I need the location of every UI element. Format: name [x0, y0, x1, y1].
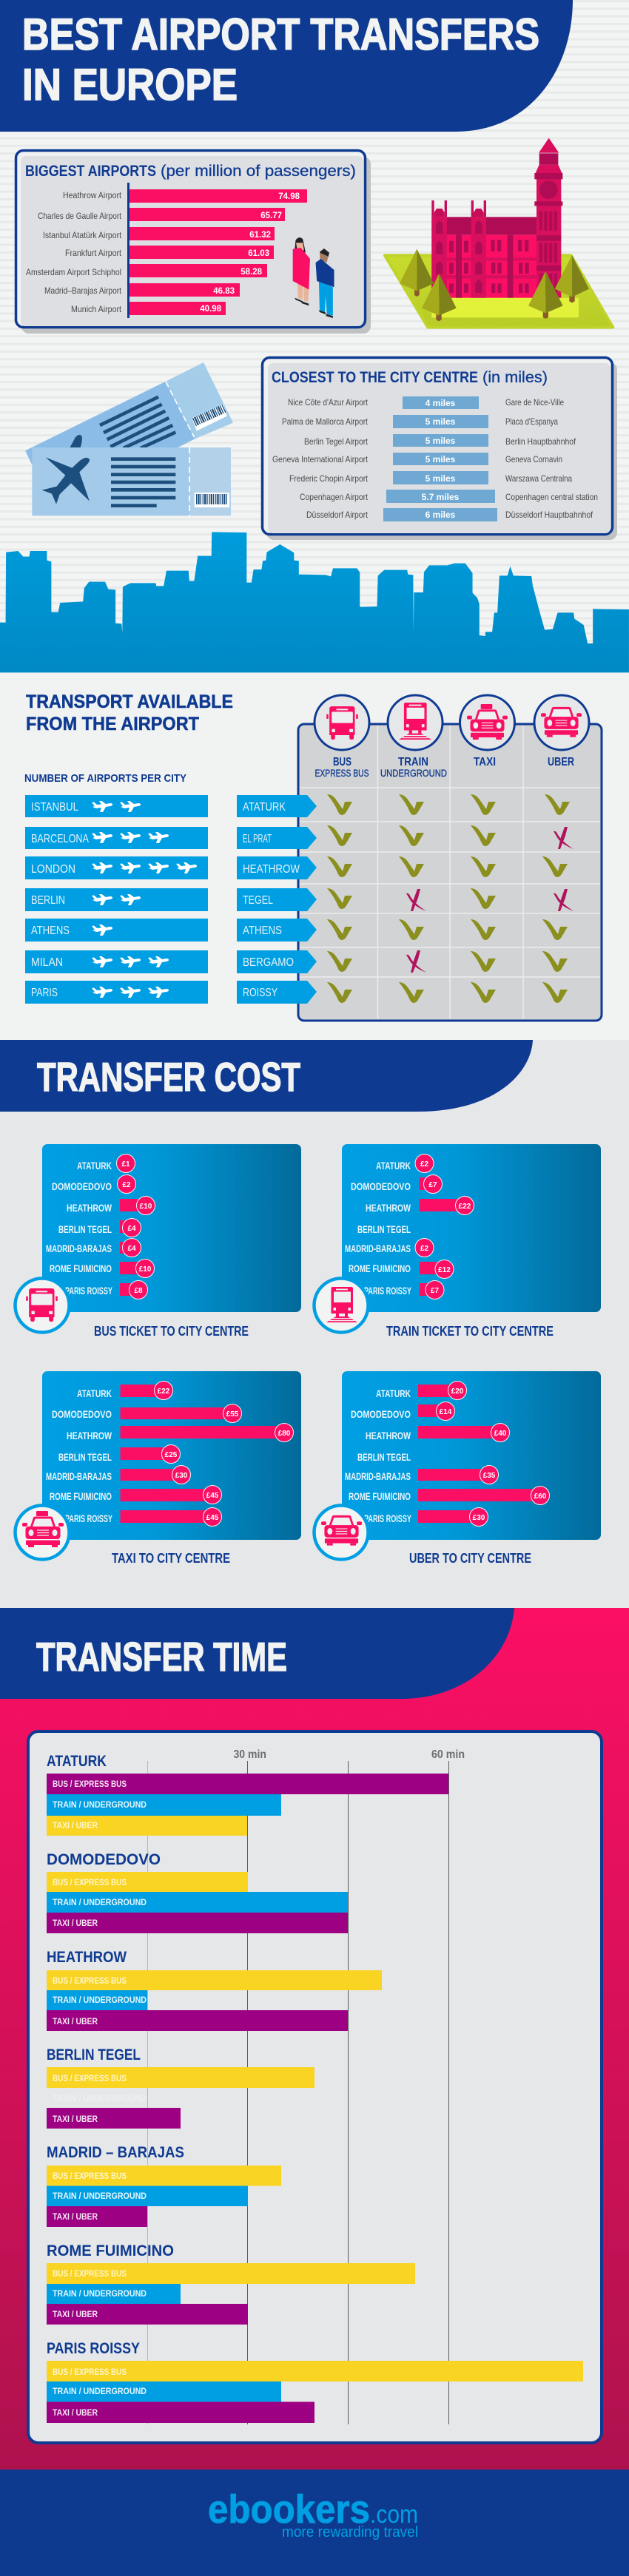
- airport arrows: TEGEL: [243, 894, 273, 907]
- panel: taxi cost: MADRID-BARAJAS: [46, 1470, 112, 1482]
- bar chart: passengers: Madrid–Barajas Airport: [44, 285, 122, 296]
- column headings: TRAIN: [398, 756, 428, 768]
- group: rome fuimicino: TAXI / UBER: [53, 2309, 98, 2319]
- illustration: big ben building and lawn: [385, 138, 613, 328]
- heading: biggest airports: (per million of passengers): [161, 163, 356, 180]
- airport names: [272, 397, 369, 520]
- group: paris roissy: TRAIN / UNDERGROUND: [53, 2386, 147, 2396]
- column headings: [315, 756, 574, 779]
- bar chart: passengers: Munich Airport: [71, 304, 122, 314]
- bar chart: passengers: Charles de Gaulle Airport: [38, 211, 122, 221]
- sub-heading: airports per city: NUMBER OF AIRPORTS PER CITY: [24, 772, 186, 785]
- heading: biggest airports: BIGGEST AIRPORTS: [25, 163, 156, 180]
- time axis: 30 min: [234, 1748, 266, 1761]
- panel: train ticket cost: £7: [428, 1181, 437, 1189]
- group: ataturk: ATATURK: [47, 1753, 107, 1770]
- group: domodedovo: DOMODEDOVO: [47, 1851, 161, 1868]
- heading: closest: CLOSEST TO THE CITY CENTRE: [272, 369, 478, 386]
- station names: [505, 397, 598, 520]
- group: berlin tegel: [47, 2046, 314, 2129]
- panel: taxi cost: PARIS ROISSY: [65, 1512, 112, 1524]
- panel: taxi cost: ROME FUIMICINO: [50, 1490, 112, 1502]
- table: transport availability: [237, 695, 602, 1021]
- panel: taxi cost: HEATHROW: [67, 1430, 112, 1441]
- panel: train ticket cost: £2: [420, 1160, 428, 1169]
- station names: Düsseldorf Hauptbahnhof: [505, 510, 593, 520]
- panel: bus ticket cost: ATATURK: [77, 1160, 112, 1172]
- column headings: BUS: [333, 756, 352, 768]
- bar chart: passengers: 61.32: [249, 231, 271, 240]
- column headings: UBER: [548, 756, 574, 768]
- group: domodedovo: [47, 1851, 348, 1933]
- station names: Gare de Nice-Ville: [505, 397, 564, 408]
- panel: taxi cost: £55: [226, 1410, 239, 1419]
- panel: bus ticket cost: [15, 1144, 301, 1339]
- station names: Copenhagen central station: [505, 492, 598, 502]
- panel: taxi cost: £25: [165, 1451, 178, 1459]
- city bars with plane counts: ISTANBUL: [31, 801, 78, 814]
- title banner: BEST AIRPORT TRANSFERS: [22, 10, 539, 59]
- panel: bus ticket cost: MADRID-BARAJAS: [46, 1243, 112, 1254]
- group: domodedovo: TRAIN / UNDERGROUND: [53, 1897, 147, 1907]
- panel: taxi cost: £45: [206, 1514, 219, 1522]
- airport names: Düsseldorf Airport: [306, 510, 369, 520]
- panel: bus ticket cost: PARIS ROISSY: [65, 1285, 112, 1297]
- caption: bus: BUS TICKET TO CITY CENTRE: [94, 1324, 249, 1339]
- logo: ebookers: more rewarding travel: [282, 2524, 418, 2540]
- airport arrows: EL PRAT: [243, 833, 272, 845]
- bar chart: passengers: 40.98: [200, 305, 222, 314]
- airport arrows: ATATURK: [243, 801, 286, 814]
- group: rome fuimicino: ROME FUIMICINO: [47, 2242, 174, 2259]
- city bars with plane counts: LONDON: [31, 863, 75, 876]
- time axis: [148, 1748, 465, 2424]
- panel: uber cost: ATATURK: [376, 1387, 411, 1399]
- column headings: TAXI: [474, 756, 496, 768]
- city bars with plane counts: BARCELONA: [31, 833, 89, 845]
- panel: transfer time chart: [28, 1731, 602, 2443]
- heading: transport available: [26, 692, 233, 734]
- group: berlin tegel: TRAIN / UNDERGROUND: [53, 2093, 147, 2103]
- bars: distance in miles: 5 miles: [426, 436, 456, 446]
- panel: uber cost: MADRID-BARAJAS: [345, 1470, 411, 1482]
- group: paris roissy: BUS / EXPRESS BUS: [53, 2367, 127, 2377]
- airport arrows: HEATHROW: [243, 863, 300, 876]
- city bars with plane counts: MILAN: [31, 956, 63, 969]
- city bars with plane counts: [25, 795, 208, 1004]
- group: ataturk: [47, 1753, 448, 1836]
- banner: transfer cost: [0, 1040, 533, 1112]
- panel: bus ticket cost: £10: [140, 1203, 152, 1211]
- group: heathrow: TRAIN / UNDERGROUND: [53, 1995, 147, 2005]
- caption: uber: UBER TO CITY CENTRE: [409, 1551, 531, 1566]
- illustration: city skyline: [0, 532, 629, 672]
- icon: two travellers: [293, 237, 334, 318]
- panel: bus ticket cost: BERLIN TEGEL: [58, 1223, 112, 1235]
- city bars with plane counts: BERLIN: [31, 894, 65, 907]
- panel: train ticket cost: PARIS ROISSY: [364, 1285, 411, 1297]
- group: madrid barajas: [47, 2144, 281, 2227]
- city bars with plane counts: ATHENS: [31, 924, 70, 937]
- panel: train ticket cost: £2: [420, 1245, 428, 1253]
- group: madrid barajas: TRAIN / UNDERGROUND: [53, 2191, 147, 2201]
- airport names: Berlin Tegel Airport: [304, 436, 369, 447]
- logo: ebookers: ebookers: [208, 2487, 370, 2532]
- panel: uber cost: £30: [473, 1514, 485, 1522]
- station names: Warszawa Centralna: [505, 473, 572, 484]
- airport names: Geneva International Airport: [272, 454, 369, 464]
- group: heathrow: TAXI / UBER: [53, 2016, 98, 2026]
- bars: distance in miles: 6 miles: [426, 510, 456, 520]
- panel: uber cost: £40: [494, 1430, 507, 1438]
- panel: uber cost: HEATHROW: [366, 1430, 411, 1441]
- bar chart: passengers: Heathrow Airport: [63, 190, 122, 200]
- airport arrows: BERGAMO: [243, 956, 294, 969]
- panel: bus ticket cost: HEATHROW: [67, 1202, 112, 1214]
- panel: bus ticket cost: £8: [134, 1287, 143, 1295]
- bar chart: passengers: Amsterdam Airport Schiphol: [26, 267, 121, 277]
- city bars with plane counts: PARIS: [31, 987, 58, 999]
- panel: uber cost: BERLIN TEGEL: [357, 1451, 411, 1463]
- column headings: UNDERGROUND: [380, 767, 447, 779]
- group: berlin tegel: TAXI / UBER: [53, 2114, 98, 2124]
- bar chart: passengers: 61.03: [248, 249, 269, 258]
- panel: bus ticket cost: £4: [127, 1245, 136, 1253]
- bars: distance in miles: 5.7 miles: [422, 492, 460, 502]
- icon: uber badge: [314, 1506, 369, 1559]
- icon: taxi circle: [460, 695, 515, 750]
- bar chart: passengers: 46.83: [213, 287, 235, 296]
- bar chart: passengers: 58.28: [240, 268, 263, 277]
- panel: taxi cost: ATATURK: [77, 1387, 112, 1399]
- group: paris roissy: [47, 2340, 583, 2423]
- airport arrows: ATHENS: [243, 924, 282, 937]
- panel: taxi cost: £30: [175, 1472, 188, 1480]
- group: madrid barajas: TAXI / UBER: [53, 2211, 98, 2222]
- bars: distance in miles: 5 miles: [426, 416, 456, 427]
- panel: train ticket cost: £12: [438, 1266, 451, 1274]
- logo: ebookers: .com: [370, 2501, 418, 2529]
- group: rome fuimicino: TRAIN / UNDERGROUND: [53, 2288, 147, 2299]
- panel: train ticket cost: [314, 1144, 601, 1339]
- icon: taxi badge: [15, 1506, 70, 1559]
- airport names: Frederic Chopin Airport: [289, 473, 369, 484]
- group: domodedovo: TAXI / UBER: [53, 1918, 98, 1928]
- group: heathrow: BUS / EXPRESS BUS: [53, 1975, 127, 1986]
- icon: bus badge: [15, 1278, 70, 1333]
- group: rome fuimicino: BUS / EXPRESS BUS: [53, 2268, 127, 2279]
- panel: taxi cost: BERLIN TEGEL: [58, 1451, 112, 1463]
- panel: train ticket cost: MADRID-BARAJAS: [345, 1243, 411, 1254]
- icons: availability checks and crosses: [327, 794, 574, 1003]
- panel: uber cost: £60: [534, 1492, 547, 1501]
- bars: distance in miles: [383, 396, 497, 521]
- group: ataturk: TRAIN / UNDERGROUND: [53, 1799, 147, 1810]
- panel: train ticket cost: HEATHROW: [366, 1202, 411, 1214]
- panel: uber cost: ROME FUIMICINO: [349, 1490, 411, 1502]
- group: ataturk: BUS / EXPRESS BUS: [53, 1779, 127, 1789]
- bar chart: passengers: [26, 183, 307, 318]
- panel: taxi cost: £22: [158, 1387, 170, 1396]
- airport names: Copenhagen Airport: [300, 492, 369, 502]
- group: rome fuimicino: [47, 2242, 415, 2325]
- time axis: 60 min: [431, 1748, 465, 1761]
- bars: distance in miles: 5 miles: [426, 473, 456, 484]
- panel: biggest airports: [16, 151, 371, 334]
- panel: uber cost: £14: [440, 1408, 452, 1416]
- panel: taxi cost: £45: [206, 1492, 219, 1500]
- group: madrid barajas: BUS / EXPRESS BUS: [53, 2171, 127, 2181]
- panel: bus ticket cost: ROME FUIMICINO: [50, 1262, 112, 1274]
- heading: transport available: FROM THE AIRPORT: [26, 714, 199, 734]
- bar chart: passengers: Frankfurt Airport: [65, 248, 122, 258]
- panel: taxi cost: £80: [278, 1430, 291, 1438]
- caption: train: TRAIN TICKET TO CITY CENTRE: [386, 1324, 554, 1339]
- icon: train badge: [314, 1278, 369, 1333]
- panel: bus ticket cost: DOMODEDOVO: [52, 1180, 112, 1192]
- illustration: boarding passes: [25, 362, 233, 515]
- group: ataturk: TAXI / UBER: [53, 1820, 98, 1830]
- bar chart: passengers: Istanbul Atatürk Airport: [43, 230, 122, 240]
- title banner: IN EUROPE: [22, 60, 238, 109]
- icons: planes: [92, 801, 197, 998]
- panel: taxi cost: [15, 1371, 301, 1566]
- heading: transport available: TRANSPORT AVAILABLE: [26, 692, 233, 712]
- panel: train ticket cost: £7: [431, 1287, 439, 1295]
- panel: uber cost: DOMODEDOVO: [351, 1408, 411, 1420]
- station names: Geneva Cornavin: [505, 454, 562, 464]
- icon: trees: [400, 249, 589, 321]
- panel: uber cost: [314, 1371, 601, 1566]
- group: berlin tegel: BERLIN TEGEL: [47, 2046, 141, 2063]
- airport names: Palma de Mallorca Airport: [282, 416, 369, 427]
- group: madrid barajas: MADRID – BARAJAS: [47, 2144, 184, 2161]
- banner: transfer time: TRANSFER TIME: [36, 1634, 287, 1680]
- panel: uber cost: PARIS ROISSY: [364, 1512, 411, 1524]
- panel: closest to the city centre: [262, 358, 617, 540]
- panel: train ticket cost: DOMODEDOVO: [351, 1180, 411, 1192]
- panel: bus ticket cost: £1: [121, 1160, 130, 1169]
- heading: closest: (in miles): [482, 369, 548, 386]
- bars: distance in miles: 4 miles: [426, 398, 456, 408]
- panel: train ticket cost: ROME FUIMICINO: [349, 1262, 411, 1274]
- group: paris roissy: TAXI / UBER: [53, 2407, 98, 2418]
- group: heathrow: HEATHROW: [47, 1949, 127, 1966]
- bars: distance in miles: 5 miles: [426, 454, 456, 464]
- panel: uber cost: £35: [483, 1472, 496, 1480]
- group: domodedovo: BUS / EXPRESS BUS: [53, 1877, 127, 1887]
- title banner: [0, 0, 573, 132]
- bar chart: passengers: 74.98: [278, 192, 300, 201]
- station names: Berlin Hauptbahnhof: [505, 436, 576, 447]
- panel: train ticket cost: £22: [459, 1203, 471, 1211]
- panel: bus ticket cost: £10: [139, 1265, 152, 1274]
- group: paris roissy: PARIS ROISSY: [47, 2340, 140, 2357]
- station names: Placa d'Espanya: [505, 416, 558, 427]
- panel: train ticket cost: BERLIN TEGEL: [357, 1223, 411, 1235]
- caption: taxi: TAXI TO CITY CENTRE: [112, 1551, 230, 1566]
- panel: uber cost: £20: [451, 1387, 464, 1396]
- icon: bus circle: [314, 695, 369, 750]
- panel: bus ticket cost: £2: [122, 1181, 131, 1189]
- heading: biggest airports: [25, 163, 356, 180]
- airport arrows: [237, 795, 317, 1004]
- airport names: Nice Côte d'Azur Airport: [288, 397, 369, 408]
- icon: uber circle: [534, 695, 589, 750]
- group: heathrow: [47, 1949, 382, 2031]
- column headings: EXPRESS BUS: [315, 767, 369, 779]
- panel: taxi cost: DOMODEDOVO: [52, 1408, 112, 1420]
- panel: train ticket cost: ATATURK: [376, 1160, 411, 1172]
- banner: transfer cost: TRANSFER COST: [37, 1054, 300, 1100]
- bar chart: passengers: 65.77: [260, 212, 282, 220]
- panel: bus ticket cost: £4: [127, 1225, 136, 1233]
- icon: train circle: [388, 695, 443, 750]
- banner: transfer time: [0, 1608, 514, 1699]
- airport arrows: ROISSY: [243, 987, 278, 999]
- group: berlin tegel: BUS / EXPRESS BUS: [53, 2073, 127, 2083]
